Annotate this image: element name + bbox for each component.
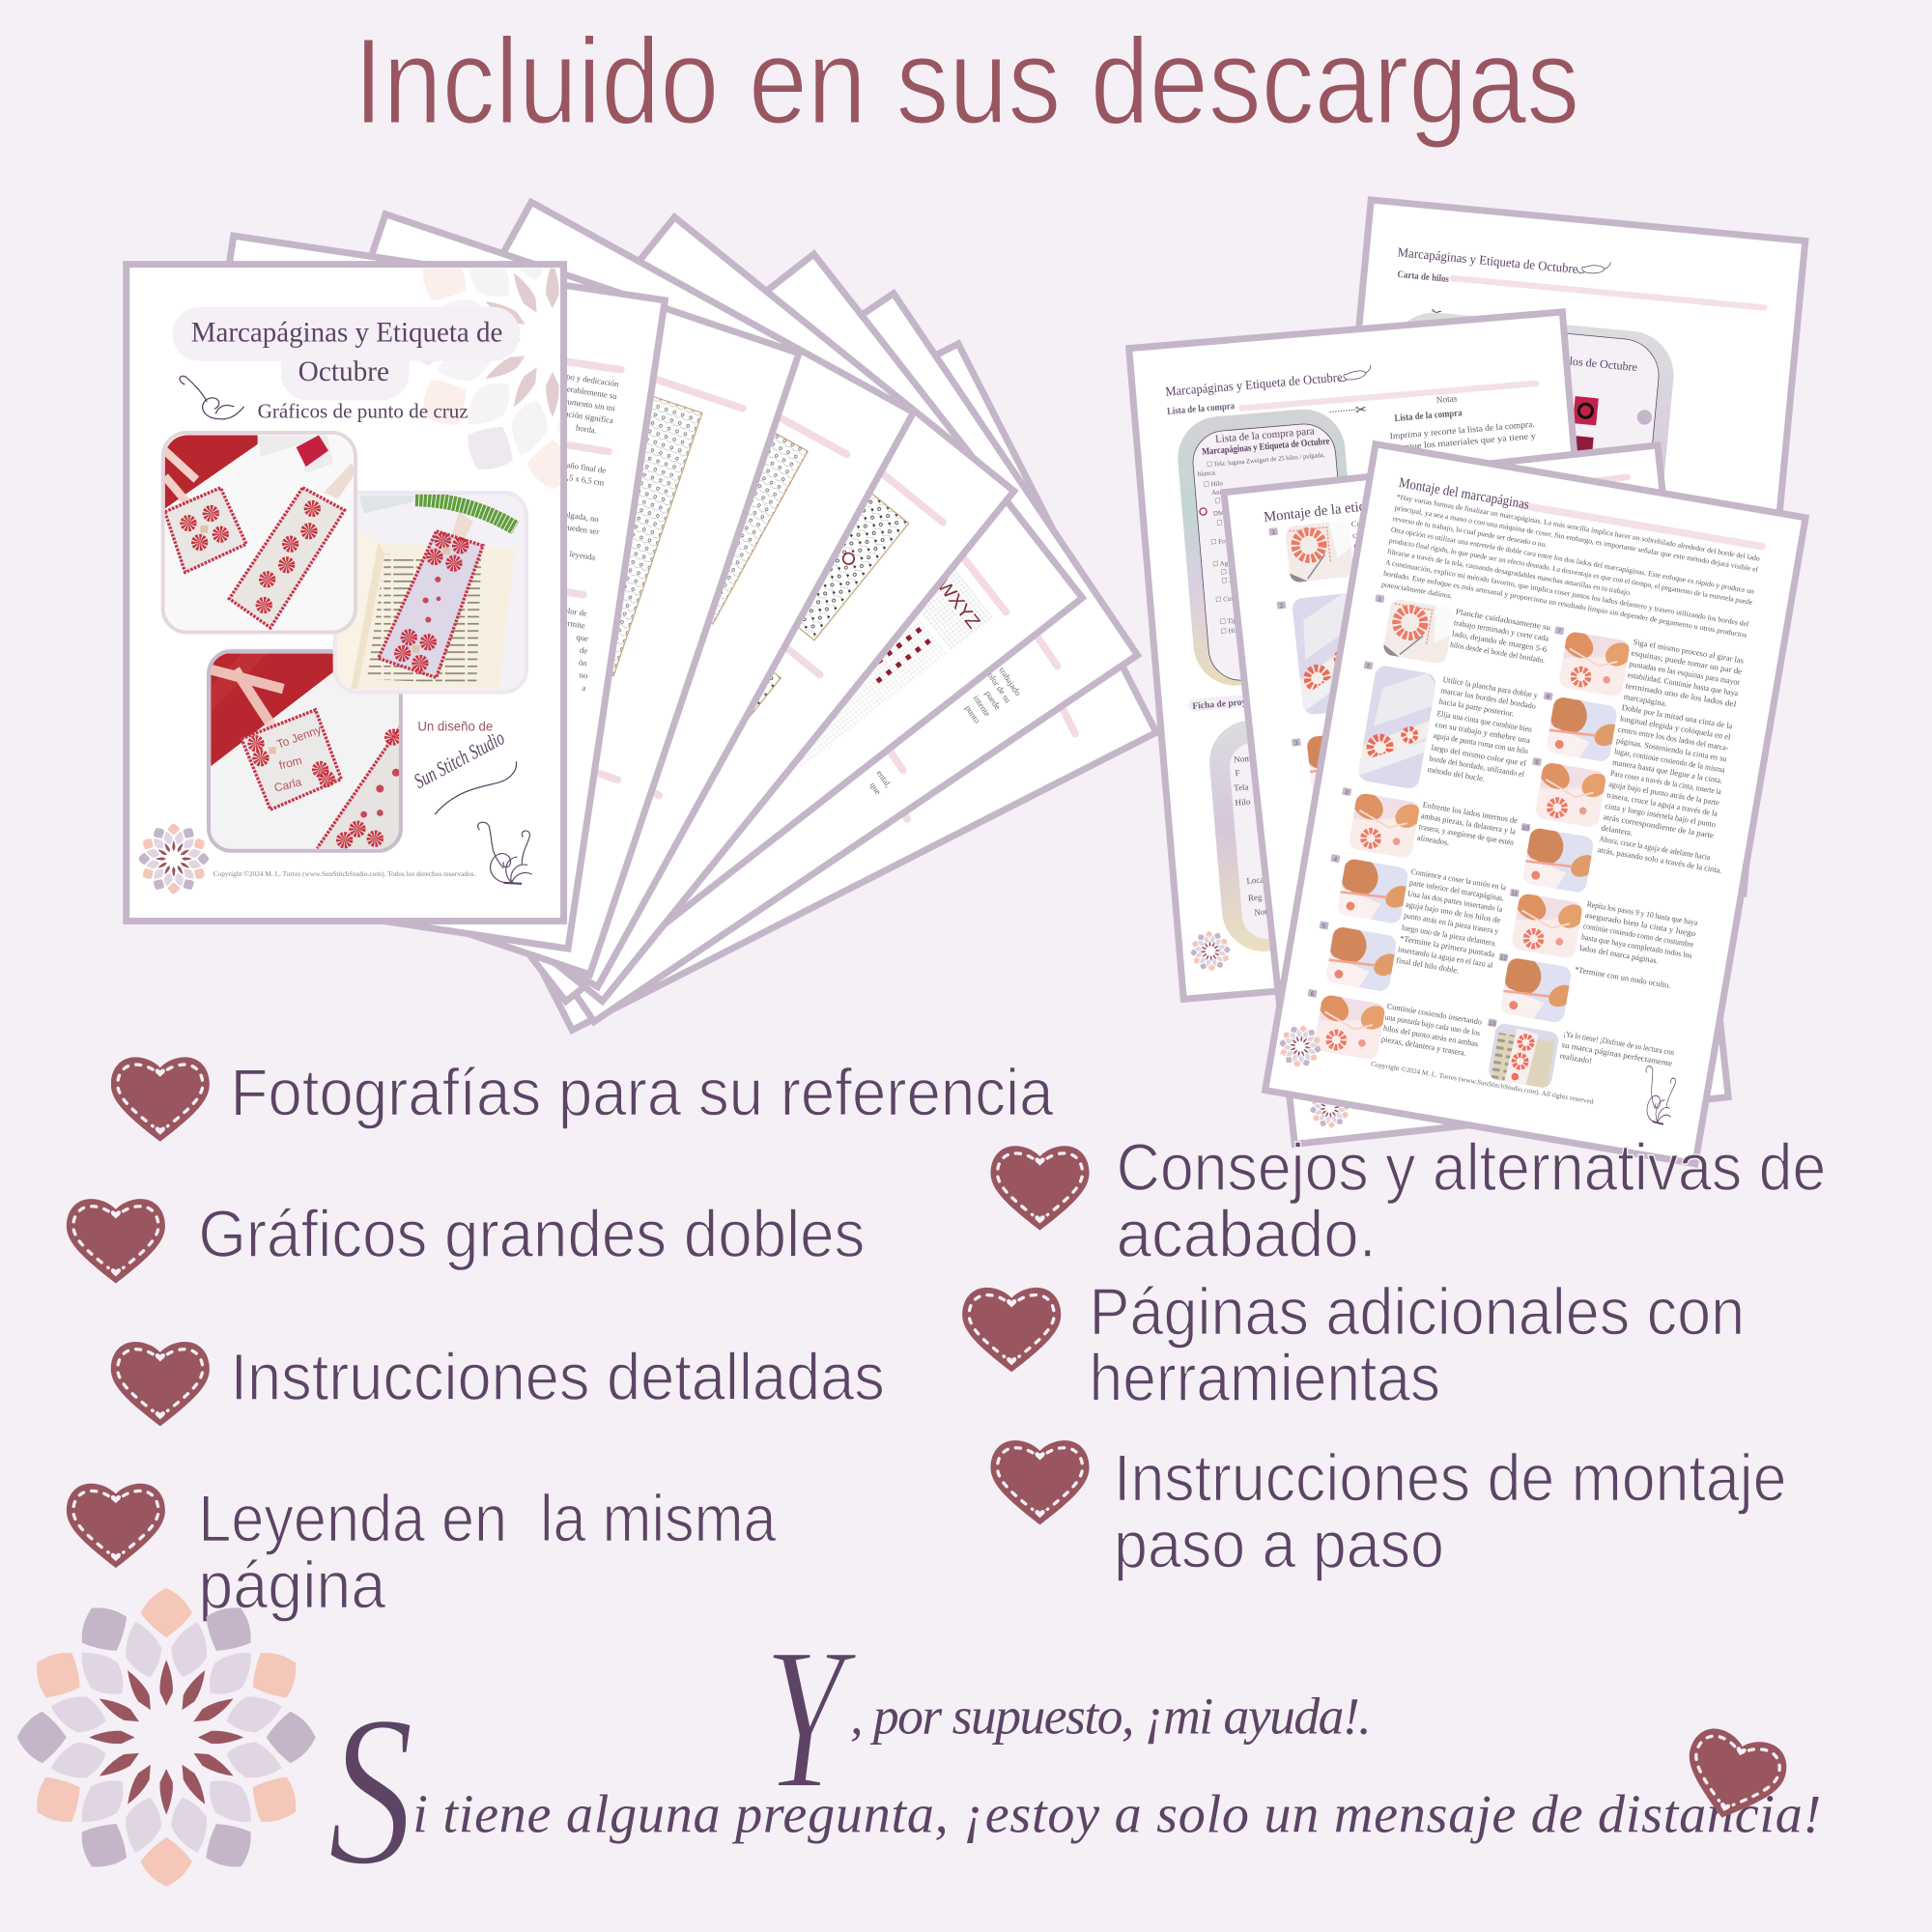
shopping list panel: Lista de la compra para bbox=[1215, 425, 1315, 445]
right column step text: estabilidad. Continúe hasta que haya bbox=[1627, 670, 1739, 698]
project sheet panel: Reg bbox=[1248, 892, 1263, 903]
step 3 photo bbox=[1291, 719, 1386, 796]
project sheet panel: Loca bbox=[1246, 874, 1264, 886]
left column step text: hacia la parte posterior. bbox=[1438, 697, 1515, 719]
fan page 3 with chart bbox=[215, 202, 914, 986]
fan page 1 with introductory text: por pulgada, no bbox=[546, 507, 599, 524]
cover title: Marcapáginas y Etiqueta de bbox=[191, 317, 502, 348]
heading: Marcapáginas y Etiqueta de Octubre bbox=[1165, 370, 1343, 399]
introduction text: A continuación, explico mi método favorito, que implica coser juntos los lados delantero y trasero utilizando los bordes del bbox=[1384, 557, 1749, 629]
fan page 4 with chart bbox=[263, 217, 1014, 1001]
cover watermark flower bbox=[421, 269, 560, 489]
second script line bbox=[327, 1672, 1821, 1911]
cover title bbox=[191, 317, 502, 422]
right column step text: manera hasta que llegue a la cinta. bbox=[1612, 758, 1723, 785]
right column step text: puntadas en las esquinas para mayor bbox=[1629, 660, 1741, 687]
left column step text: Utilice la plancha para doblar y bbox=[1442, 675, 1539, 700]
shopping list panel: ☐ 2 bbox=[1220, 568, 1233, 577]
feature: charts bbox=[67, 1197, 865, 1283]
left column step text: Comience a coser la unión en la bbox=[1410, 867, 1507, 892]
right column step text: lados del marca páginas. bbox=[1578, 944, 1659, 966]
introduction text: bordado. Este enfoque es más artesanal y proporciona un resultado limpio sin depender de pegamento u otros productos bbox=[1383, 569, 1747, 639]
left column step text: trasera, y asegúrese de que estén bbox=[1418, 822, 1515, 847]
right column step photos: 10 bbox=[1521, 824, 1530, 833]
fan page 6: punto bbox=[963, 703, 982, 725]
right column step photos: 8 bbox=[1546, 694, 1550, 701]
cover title: Octubre bbox=[298, 356, 389, 387]
pillow inscription: Carla bbox=[272, 775, 303, 795]
feature: assembly instructions: Instrucciones de montaje bbox=[1114, 1441, 1786, 1516]
fan page 1 with introductory text: de bbox=[579, 645, 588, 656]
feature: additional pages: herramientas bbox=[1090, 1341, 1440, 1415]
left column step text: Continúe cosiendo insertando bbox=[1386, 1002, 1483, 1027]
right column step photos: 12 bbox=[1499, 954, 1508, 962]
fan page 1 with introductory text: a bbox=[582, 683, 586, 693]
right column step text: ¡Ya lo tiene! ¡Disfrute de su lectura con bbox=[1563, 1030, 1675, 1057]
left column step text: punto atrás en la pieza trasera y bbox=[1404, 911, 1500, 936]
introduction text: *Hay varias formas de finalizar un marcapáginas. La más sencilla implica hacer un sobrehilado alrededor del borde del lado bbox=[1396, 493, 1761, 563]
step 3 photo: 3 bbox=[1294, 740, 1299, 747]
project sheet panel: Tela bbox=[1234, 781, 1249, 793]
cover flower logo bbox=[138, 823, 209, 895]
step text fragment: cuidadosamente bbox=[1352, 526, 1406, 540]
feature: legend: página bbox=[198, 1548, 386, 1623]
cut line: ✂ bbox=[1355, 402, 1368, 418]
right column step text: aguja bajo el punto atrás de la parte bbox=[1608, 780, 1720, 808]
left column step photos: 6 bbox=[1310, 991, 1315, 998]
signature: Sun Stitch Studio bbox=[411, 726, 508, 793]
cover corner flourish bbox=[478, 822, 532, 884]
shopping list panel bbox=[1175, 406, 1364, 689]
fan page 1 with introductory text: la leyenda bbox=[561, 548, 596, 562]
project sheet panel bbox=[1207, 709, 1405, 954]
step text fragment bbox=[1350, 515, 1408, 573]
introduction text bbox=[1381, 493, 1761, 650]
large flower logo bbox=[17, 1588, 316, 1887]
project sheet panel: F bbox=[1235, 768, 1240, 778]
fan page 1 with introductory text: pueden ser bbox=[563, 522, 600, 536]
pink rule bbox=[1523, 506, 1762, 547]
bookmark assembly page bbox=[1265, 444, 1805, 1164]
step 2 photo: 2 bbox=[1279, 603, 1284, 610]
right column step text: Doble por la mitad una cinta de la bbox=[1621, 703, 1733, 730]
feature: finishing tips: Consejos y alternativas de bbox=[1117, 1130, 1826, 1205]
thread colour panel bbox=[1359, 308, 1678, 703]
step 1 photo bbox=[1268, 520, 1354, 584]
introduction text: filtrarse a través de la tela, causando desagradables manchas amarillas en tu trabajo. bbox=[1386, 547, 1633, 597]
shopping list panel: DMC bbox=[1213, 509, 1229, 518]
pink rule bbox=[1453, 278, 1764, 307]
cover title: Gráficos de punto de cruz bbox=[258, 399, 469, 422]
heading: Marcapáginas y Etiqueta de Octubre bbox=[1397, 244, 1578, 276]
right column step text: longitud elegida y colóquela en el bbox=[1619, 714, 1732, 742]
shopping list panel: ☐ Sin bbox=[1214, 496, 1232, 505]
scissors: ✂ bbox=[1430, 305, 1443, 322]
fan page 1 with introductory text: documento sin mi bbox=[555, 395, 616, 413]
pillow inscription bbox=[274, 726, 321, 791]
step 1 photo: 1 bbox=[1271, 529, 1276, 536]
heading: Montaje de la etiqueta bbox=[1263, 497, 1391, 526]
feature: assembly instructions: paso a paso bbox=[1114, 1507, 1444, 1581]
left column step text: lado, dejando de margen 5-6 bbox=[1451, 629, 1548, 654]
shopping list panel: ☐ 4 bbox=[1216, 519, 1229, 527]
project sheet panel: Nombre bbox=[1234, 753, 1263, 764]
right column step photos: 7 bbox=[1557, 628, 1562, 636]
title ornament bbox=[1577, 259, 1610, 275]
fan page 6: intente bbox=[972, 694, 992, 718]
right column step photos: 13 bbox=[1489, 1020, 1496, 1028]
shopping list panel: ☐ Hilo bbox=[1220, 626, 1241, 636]
fan page 1 with introductory text: tiempo y dedicación bbox=[551, 369, 620, 388]
cover photographs bbox=[163, 433, 526, 851]
left column step text: trabajo terminado y corte cada bbox=[1453, 618, 1549, 643]
feature: legend: Leyenda en la misma bbox=[198, 1482, 777, 1556]
tag assembly page bbox=[1224, 445, 1728, 1144]
cover flourish bbox=[180, 376, 244, 419]
project sheet label: Ficha de proyecto bbox=[1192, 696, 1263, 712]
cover page bbox=[127, 191, 701, 921]
right column step text: centro entre los dos lados del marca- bbox=[1617, 725, 1729, 753]
left column step text: ambas piezas, la delantera y la bbox=[1420, 811, 1517, 837]
fan page 1 with introductory text: permite bbox=[559, 617, 586, 631]
left column step text: *Termine la primera puntada bbox=[1399, 934, 1495, 959]
fan page 6: que bbox=[868, 781, 883, 796]
fan page 1 with introductory text: tamaño final de bbox=[554, 458, 607, 475]
left column step text: largo del mismo color que el bbox=[1431, 743, 1527, 768]
introduction text: Otra opción es utilizar una entretela de doble cara entre los dos lados del marcapáginas. Este enfoque es rápido y produce un bbox=[1390, 526, 1755, 596]
feature: photographs: Fotografías para su referencia bbox=[231, 1055, 1054, 1129]
feature: additional pages: Páginas adicionales con bbox=[1090, 1274, 1745, 1349]
right column step text: Ahora, cruce la aguja de adelante hacia bbox=[1599, 835, 1711, 862]
right column step text: atrás, pasando solo a través de la cinta. bbox=[1597, 845, 1722, 875]
feature: additional pages bbox=[962, 1274, 1745, 1415]
right column step text: delantera. bbox=[1601, 823, 1634, 838]
fan page 6: ental, bbox=[875, 768, 894, 789]
right column step text: lugar, continúe cosiendo de la misma bbox=[1613, 747, 1726, 775]
introduction text: producto final rígido, lo que puede ser un efecto deseado. La desventaja es que con el tiempo, el pegamento de la entretela puede bbox=[1388, 536, 1753, 607]
first script line: , por supuesto, ¡mi ayuda!. bbox=[850, 1688, 1372, 1746]
left column step text: marcar los bordes del bordado bbox=[1440, 686, 1537, 711]
shopping list panel: ☐ 2 bbox=[1221, 576, 1234, 584]
pink rule bbox=[1382, 477, 1628, 503]
shopping list panel: Ancho bbox=[1211, 489, 1230, 497]
fan page 6 bbox=[350, 294, 1137, 1022]
left column step photos: 2 bbox=[1366, 663, 1371, 670]
left column step text: final del hilo doble. bbox=[1396, 956, 1460, 976]
left column step text bbox=[1380, 608, 1552, 1060]
left column step text: aguja bajo uno de los hilos de bbox=[1405, 900, 1501, 924]
right column step text: realizado! bbox=[1559, 1051, 1593, 1065]
introduction text: reverso de tu trabajo, lo cual puede ser deseado o no. bbox=[1392, 514, 1548, 549]
subheading: Lista de la compra bbox=[1167, 401, 1235, 417]
closing script message bbox=[327, 1605, 1821, 1911]
notes column bbox=[1387, 387, 1537, 452]
fan page 1 with introductory text: ón bbox=[578, 657, 588, 668]
step text fragment: terminado bbox=[1353, 539, 1387, 551]
thread colour panel: Lista de hilos de Octubre bbox=[1520, 350, 1638, 374]
pink rule bbox=[1241, 384, 1536, 409]
left column step photos: 4 bbox=[1333, 856, 1338, 864]
flower logo bbox=[1276, 1022, 1324, 1070]
shopping list panel: ☐ Cinta bbox=[1215, 594, 1237, 604]
cover copyright: Copyright ©2024 M. L. Torres (www.SunStitchStudio.com). Todos los derechos reservados. bbox=[213, 871, 476, 878]
left column step text: Una las dos partes insertando la bbox=[1406, 889, 1503, 914]
feature: instructions bbox=[111, 1340, 885, 1426]
notes column: Imprima y recorte la lista de la compra. bbox=[1389, 419, 1535, 440]
project sheet panel: Not bbox=[1254, 906, 1268, 917]
left column step photos: 1 bbox=[1378, 596, 1382, 604]
left column step text: Elija una cinta que combine bien bbox=[1436, 709, 1533, 734]
right column step text: Repita los pasos 9 y 10 hasta que haya bbox=[1586, 899, 1698, 927]
fan page 1 with introductory text: 5,5 x 6,5 cm bbox=[562, 471, 605, 488]
left column step text: Planche cuidadosamente su bbox=[1455, 608, 1552, 633]
left column step text: hilos del punto atrás en ambas bbox=[1382, 1024, 1479, 1048]
cover title pill bbox=[173, 307, 520, 401]
fan page 6: puede bbox=[983, 689, 1003, 711]
left column step text: una puntada bajo cada uno de los bbox=[1384, 1012, 1481, 1037]
signature bbox=[411, 726, 517, 814]
right column step photos: 11 bbox=[1511, 890, 1519, 897]
pillow inscription: from bbox=[277, 753, 303, 772]
introduction text: potencialmente dañinos. bbox=[1381, 580, 1453, 601]
right column step photos bbox=[1477, 620, 1641, 1094]
flourish bbox=[1637, 1065, 1679, 1125]
title ornament bbox=[1338, 365, 1372, 382]
notes column: Lista de la compra bbox=[1394, 408, 1463, 424]
step 2 photo bbox=[1276, 592, 1365, 717]
title: Incluido en sus descargas bbox=[354, 14, 1579, 150]
photo: bookmark on open book bbox=[335, 493, 526, 692]
introduction text: principal, ya sea a mano o con una máquina de coser. Sin embargo, es importante señalar que este método dejará visible el bbox=[1394, 503, 1759, 574]
fan page 1 with introductory text: autorización significa bbox=[541, 405, 614, 425]
fan page 1 with introductory text: no bbox=[579, 669, 588, 681]
heading: Montaje del marcapáginas bbox=[1398, 475, 1530, 513]
photo: pillow and bookmark with ribbon bbox=[209, 651, 403, 851]
left column step photos bbox=[1298, 594, 1464, 1063]
right column step text: marcapágina. bbox=[1623, 693, 1667, 708]
step text fragment: Comience bbox=[1350, 517, 1385, 528]
left column step text: parte inferior del marcapáginas. bbox=[1408, 878, 1505, 903]
fan page 1 with introductory text: borda. bbox=[576, 422, 598, 436]
left column step text: alineados. bbox=[1416, 834, 1450, 847]
left column step text: hilos desde el borde del bordado. bbox=[1449, 640, 1546, 665]
thread chart page bbox=[1309, 200, 1805, 894]
right column step text: hasta que haya completado todos los bbox=[1580, 932, 1692, 960]
feature: charts: Gráficos grandes dobles bbox=[198, 1197, 865, 1271]
fanned chart pages bbox=[136, 202, 1156, 1030]
pillow inscription: To Jenny bbox=[275, 723, 323, 752]
cut line bbox=[1329, 402, 1368, 420]
right column step text: atrás correspondiente de la parte bbox=[1603, 812, 1715, 840]
left column step photos: 3 bbox=[1345, 789, 1350, 796]
fan page 1 with introductory text: que bbox=[576, 632, 589, 643]
feature: finishing tips bbox=[991, 1130, 1826, 1271]
right column step text: su marca páginas perfectamente bbox=[1561, 1040, 1673, 1068]
right column step text: trasera, cruce la aguja a través de la bbox=[1606, 791, 1719, 818]
feature: finishing tips: acabado. bbox=[1117, 1197, 1377, 1271]
project sheet label bbox=[1188, 692, 1288, 712]
shopping list panel: blanca. bbox=[1198, 469, 1217, 478]
right column step text: *Termine con un nudo oculto. bbox=[1574, 965, 1671, 990]
shopping list panel: ☐ Agujas bbox=[1212, 558, 1239, 568]
designer credit: Un diseño de bbox=[417, 718, 493, 733]
right column step text: Para coser a través de la cinta, inserte la bbox=[1610, 769, 1722, 796]
first script line bbox=[764, 1605, 1372, 1831]
fan page 6: color de su bbox=[983, 668, 1013, 705]
feature: instructions: Instrucciones detalladas bbox=[231, 1340, 885, 1414]
left column step photos: 5 bbox=[1321, 923, 1326, 930]
notes column: Notas bbox=[1435, 393, 1458, 406]
shopping list panel: ☐ Hilo bbox=[1203, 479, 1224, 489]
flower logo bbox=[1189, 929, 1232, 973]
shopping list panel: ☐ Fondo bbox=[1210, 536, 1236, 546]
step text fragment: bordado bbox=[1355, 561, 1383, 573]
copyright: Copyright ©2024 M. L. Torres (www.SunStitchStudio.com). All rights reserved bbox=[1371, 1060, 1594, 1106]
feature: assembly instructions bbox=[991, 1440, 1786, 1581]
step text fragment: lado, bbox=[1354, 552, 1372, 562]
shopping list panel: ☐ Tela: lugana Zweigart de 25 hilos / pulgada, bbox=[1207, 451, 1325, 469]
right column step text: esquinas; puede tomar un par de bbox=[1631, 648, 1743, 676]
decorative heart over message bbox=[1674, 1723, 1793, 1832]
left column step text: método del bucle. bbox=[1427, 765, 1486, 783]
left column step text: borde del bordado, utilizando el bbox=[1429, 754, 1525, 779]
project sheet panel: Hilo bbox=[1235, 797, 1251, 808]
left column step text: insertando la aguja en el lazo al bbox=[1397, 945, 1494, 970]
fan page 7 bbox=[374, 344, 1156, 1030]
feature list bbox=[67, 1055, 1826, 1623]
notes column: Marque los materiales que ya tiene y bbox=[1390, 431, 1537, 452]
right column step text: terminado uno de los lados del bbox=[1625, 681, 1738, 709]
shopping list panel: ☐ Tijeras bbox=[1220, 616, 1246, 626]
shopping list page bbox=[1129, 312, 1617, 999]
right column step photos: 9 bbox=[1535, 759, 1540, 766]
left column step text: con su trabajo y enhebre una bbox=[1435, 720, 1531, 745]
feature: legend bbox=[67, 1482, 777, 1623]
fan page 1 with introductory text bbox=[136, 236, 665, 949]
right column step text: Siga el mismo proceso al girar las bbox=[1633, 638, 1745, 666]
first script line: Y bbox=[764, 1605, 857, 1831]
subheading: Carta de hilos bbox=[1397, 270, 1449, 285]
right column step text: continúe cosiendo como de costumbre bbox=[1582, 922, 1694, 950]
photo: pillow, bookmark and threads bbox=[163, 433, 357, 632]
right column step text: páginas. Sosteniendo la cinta en su bbox=[1615, 736, 1728, 764]
left column step text: Enfrente los lados internos de bbox=[1422, 801, 1519, 825]
right column step text: asegurado bien la cinta y luego bbox=[1584, 911, 1696, 938]
left column step text: aguja de punta roma con un hilo bbox=[1433, 731, 1529, 755]
left column step text: luego uno de la pieza delantera. bbox=[1401, 923, 1497, 948]
right column step text bbox=[1559, 638, 1758, 1082]
fan page 2 with chart bbox=[177, 214, 799, 975]
fan page 1 with introductory text: considerablemente su bbox=[545, 381, 618, 401]
left column step text: piezas, delantera y trasera. bbox=[1380, 1035, 1466, 1058]
fan page 5 with alphabet chart: WXYZ bbox=[932, 576, 983, 633]
fan page 5 with alphabet chart bbox=[298, 254, 1082, 1002]
flower logo bbox=[1308, 1086, 1351, 1130]
right column step text: cinta y luego insértela bajo el punto bbox=[1605, 802, 1717, 829]
second script line: i tiene alguna pregunta, ¡estoy a solo un mensaje de distancia! bbox=[412, 1785, 1821, 1845]
fan page 1 with introductory text: color de bbox=[559, 605, 588, 618]
fan page 6: trabajado bbox=[997, 666, 1023, 697]
shopping list panel: Marcapáginas y Etiqueta de Octubre bbox=[1202, 437, 1330, 458]
second script line: S bbox=[327, 1672, 414, 1911]
